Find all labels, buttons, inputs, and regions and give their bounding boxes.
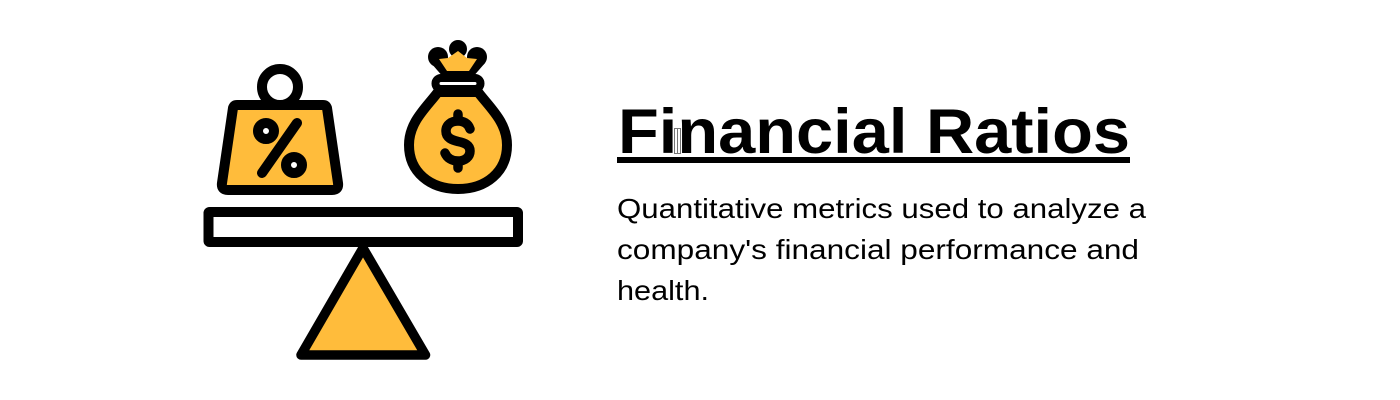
icon: balance scale [208, 40, 518, 355]
description text: health. [617, 275, 709, 306]
description text: Quantitative metrics used to analyze a [617, 193, 1146, 224]
icon: scale beam [208, 212, 518, 242]
icon: triangle fulcrum [301, 248, 426, 355]
icon: money bag [409, 40, 507, 189]
description text [617, 193, 1146, 306]
icon: percent weight [222, 69, 338, 190]
text cursor [674, 128, 680, 154]
title: Financial Ratios [618, 97, 1130, 167]
description text: company's financial performance and [617, 234, 1139, 265]
